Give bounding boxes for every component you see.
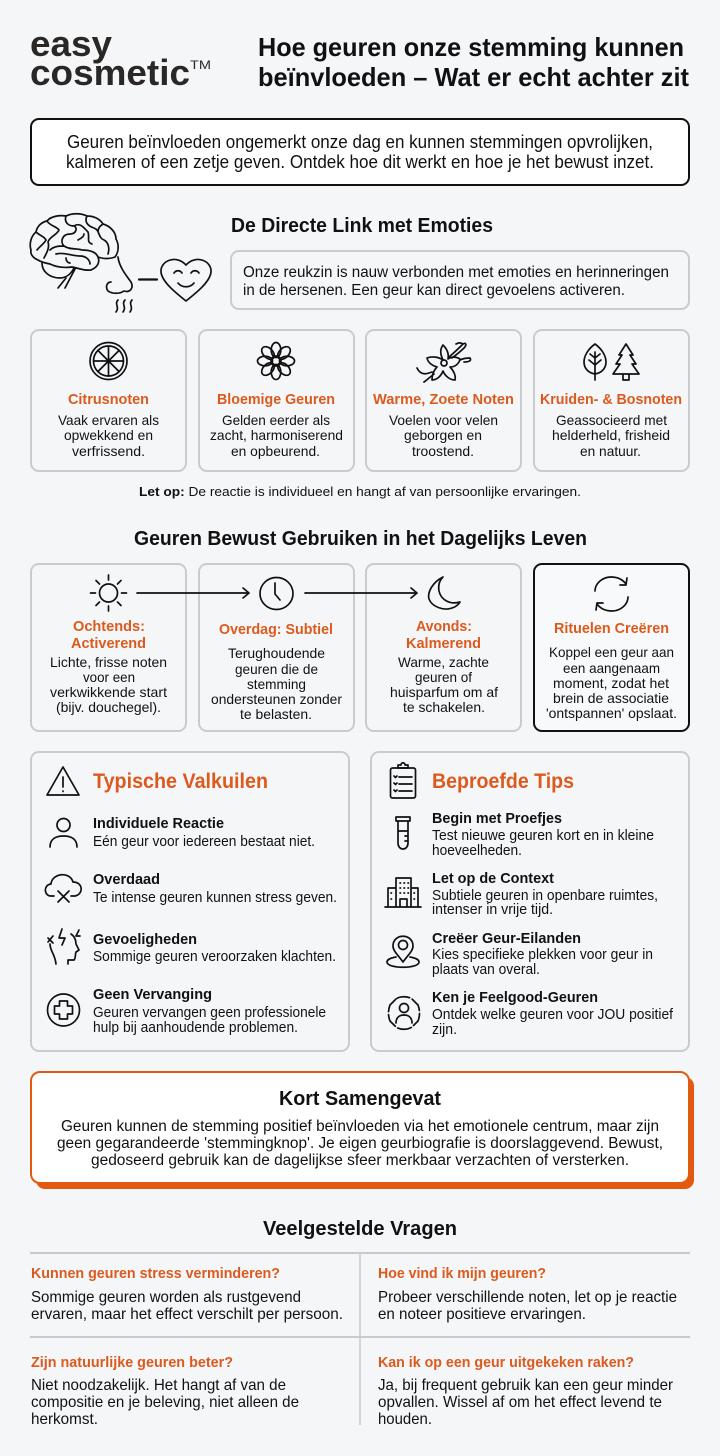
panel: Kruiden- & Bosnoten: Geassocieerd met bbox=[556, 412, 667, 428]
panel: Kort Samengevat: geen gegarandeerde 'stemmingknop'. Je eigen geurbiografie is doorslaggevend. Bewust, bbox=[57, 1135, 663, 1152]
icon: office buildings bbox=[385, 878, 421, 907]
panel: Beproefde Tips: plaats van overal. bbox=[432, 962, 540, 978]
panel: Avonds: geuren of bbox=[415, 669, 472, 685]
icon: test tube bbox=[396, 817, 410, 849]
panel: Ochtends: voor een bbox=[83, 669, 135, 685]
icon: head with lightning bbox=[48, 929, 80, 964]
icon: clock bbox=[260, 578, 293, 610]
panel: Overdag: geuren die de bbox=[235, 661, 318, 677]
panel: Citrusnoten: verfrissend. bbox=[72, 443, 145, 459]
panel: Ochtends: Ochtends: bbox=[73, 618, 145, 635]
icon: cloud with x bbox=[45, 875, 81, 902]
panel: Avonds bbox=[366, 564, 521, 731]
panel: Kort Samengevat: Kort Samengevat bbox=[279, 1088, 441, 1110]
panel: Typische Valkuilen: Geuren vervangen geen professionele bbox=[93, 1005, 326, 1021]
panel: Avonds: Warme, zachte bbox=[398, 654, 489, 670]
faq: natuurlijk: herkomst. bbox=[31, 1411, 98, 1428]
panel: Rituelen Creëren: brein de associatie bbox=[553, 690, 669, 706]
faq: mijn geuren: Probeer verschillende noten, let op je reactie bbox=[378, 1289, 677, 1306]
panel: Typische Valkuilen: hulp bij aanhoudende problemen. bbox=[93, 1020, 298, 1036]
faq: uitgekeken: Kan ik op een geur uitgekeken raken? bbox=[378, 1354, 634, 1371]
panel: Bloemige Geuren: Gelden eerder als bbox=[222, 412, 330, 428]
icon: flower bbox=[258, 342, 294, 380]
panel: Beproefde Tips bbox=[371, 752, 689, 1051]
panel: Citrusnoten: Citrusnoten bbox=[68, 391, 149, 408]
panel: Beproefde Tips: zijn. bbox=[432, 1022, 457, 1038]
icon: brain nose heart bbox=[30, 214, 211, 312]
panel: Rituelen Creëren: 'ontspannen' opslaat. bbox=[546, 705, 677, 721]
faq: stress: Kunnen geuren stress verminderen? bbox=[31, 1265, 280, 1282]
intro box bbox=[31, 119, 689, 185]
icon: clipboard bbox=[390, 763, 416, 798]
panel: Rituelen Creëren bbox=[534, 564, 689, 731]
panel: Ochtends: Activerend bbox=[71, 635, 146, 652]
faq: natuurlijk: Niet noodzakelijk. Het hangt af van de bbox=[31, 1377, 286, 1394]
panel: Typische Valkuilen: Gevoeligheden bbox=[93, 931, 197, 948]
panel: Kruiden- & Bosnoten bbox=[534, 330, 689, 471]
panel: Kort Samengevat: Geuren kunnen de stemming positief beïnvloeden via het emotionele centrum, maar zijn bbox=[61, 1118, 659, 1135]
panel: Overdag: te belasten. bbox=[240, 706, 312, 722]
note: Let op: Let op: De reactie is individueel en hangt af van persoonlijke ervaringen. bbox=[139, 484, 581, 499]
faq: uitgekeken bbox=[378, 1354, 674, 1428]
faq: uitgekeken: Ja, bij frequent gebruik kan een geur minder bbox=[378, 1377, 674, 1394]
panel: Citrusnoten: Vaak ervaren als bbox=[58, 412, 159, 428]
faq: stress: Sommige geuren worden als rustgevend bbox=[31, 1289, 301, 1306]
panel: Warme, Zoete Noten: Voelen voor velen bbox=[389, 412, 498, 428]
faq: mijn geuren bbox=[378, 1265, 677, 1323]
text box: reukzin bbox=[231, 251, 689, 309]
faq: natuurlijk bbox=[31, 1354, 299, 1428]
intro box: kalmeren of een zetje geven. Ontdek hoe dit werkt en hoe je het bewust inzet. bbox=[66, 152, 654, 172]
panel: Citrusnoten: opwekkend en bbox=[64, 427, 153, 443]
panel: Kort Samengevat: gedoseerd gebruik kan de dagelijkse sfeer merkbaar verzachten of versterken. bbox=[91, 1152, 629, 1169]
panel: Bloemige Geuren bbox=[199, 330, 354, 471]
panel: Typische Valkuilen: Overdaad bbox=[93, 871, 160, 888]
panel: Warme, Zoete Noten: troostend. bbox=[412, 443, 474, 459]
panel: Typische Valkuilen: Individuele Reactie bbox=[93, 815, 224, 832]
panel: Bloemige Geuren: en opbeurend. bbox=[231, 443, 320, 459]
panel: Kruiden- & Bosnoten: helderheld, frisheid bbox=[552, 427, 670, 443]
panel: Kruiden- & Bosnoten: Kruiden- & Bosnoten bbox=[540, 391, 682, 408]
arrow: overdag to avond bbox=[305, 588, 417, 598]
panel: Rituelen Creëren: Koppel een geur aan bbox=[549, 644, 674, 660]
panel: Typische Valkuilen: Sommige geuren veroorzaken klachten. bbox=[93, 949, 336, 965]
panel: Ochtends: (bijv. douchegel). bbox=[56, 699, 161, 715]
faq: stress bbox=[31, 1265, 343, 1323]
faq: mijn geuren: en noteer positieve ervaringen. bbox=[378, 1306, 586, 1323]
faq: stress: ervaren, maar het effect verschilt per persoon. bbox=[31, 1306, 343, 1323]
icon: person bbox=[50, 818, 77, 847]
icon: vanilla flower bbox=[417, 343, 471, 382]
panel: Avonds: te schakelen. bbox=[403, 699, 485, 715]
panel: Typische Valkuilen: Geen Vervanging bbox=[93, 986, 212, 1003]
panel: Overdag bbox=[199, 564, 354, 731]
title: Hoe geuren onze stemming kunnen bbox=[258, 32, 684, 62]
panel: Avonds: huisparfum om af bbox=[390, 684, 498, 700]
logo: cosmetic bbox=[30, 52, 190, 93]
panel: Bloemige Geuren: Bloemige Geuren bbox=[217, 391, 335, 408]
icon: citrus slice bbox=[90, 342, 127, 380]
icon: person in scent cloud bbox=[388, 997, 420, 1029]
panel: Warme, Zoete Noten: geborgen en bbox=[404, 427, 482, 443]
panel: Overdag: Terughoudende bbox=[228, 645, 325, 661]
icon: medical cross bbox=[48, 994, 80, 1026]
panel: Beproefde Tips: Creëer Geur-Eilanden bbox=[432, 930, 581, 947]
panel: Warme, Zoete Noten bbox=[366, 330, 521, 471]
panel: Ochtends: verkwikkende start bbox=[50, 684, 167, 700]
icon: warning triangle bbox=[47, 767, 79, 795]
panel: Beproefde Tips: intenser in vrije tijd. bbox=[432, 902, 553, 918]
panel: Typische Valkuilen: Eén geur voor iedereen bestaat niet. bbox=[93, 834, 315, 850]
panel: Typische Valkuilen: Te intense geuren kunnen stress geven. bbox=[93, 890, 337, 906]
heading: Veelgestelde Vragen: Veelgestelde Vragen bbox=[263, 1218, 457, 1240]
icon: leaf and tree bbox=[584, 344, 639, 380]
panel: Rituelen Creëren: moment, zodat het bbox=[553, 675, 669, 691]
faq: mijn geuren: Hoe vind ik mijn geuren? bbox=[378, 1265, 546, 1282]
logo bbox=[30, 23, 211, 93]
panel: Overdag: stemming bbox=[247, 676, 306, 692]
title: beïnvloeden – Wat er echt achter zit bbox=[258, 62, 689, 92]
intro box: Geuren beïnvloeden ongemerkt onze dag en kunnen stemmingen opvrolijken, bbox=[67, 132, 653, 152]
panel: Citrusnoten bbox=[31, 330, 186, 471]
faq: natuurlijk: compositie en je beleving, niet alleen de bbox=[31, 1394, 299, 1411]
panel: Beproefde Tips: Ontdek welke geuren voor JOU positief bbox=[432, 1007, 674, 1023]
panel: Beproefde Tips: Let op de Context bbox=[432, 870, 554, 887]
heading: Geuren Bewust Gebruiken: Geuren Bewust Gebruiken in het Dagelijks Leven bbox=[134, 528, 587, 550]
panel: Kort Samengevat bbox=[31, 1072, 694, 1189]
panel: Beproefde Tips: Begin met Proefjes bbox=[432, 810, 562, 827]
panel: Beproefde Tips: Ken je Feelgood-Geuren bbox=[432, 989, 598, 1006]
panel: Warme, Zoete Noten: Warme, Zoete Noten bbox=[373, 391, 514, 408]
text box: reukzin: Onze reukzin is nauw verbonden met emoties en herinneringen bbox=[243, 264, 669, 281]
text box: reukzin: in de hersenen. Een geur kan direct gevoelens activeren. bbox=[243, 282, 625, 299]
faq: natuurlijk: Zijn natuurlijke geuren beter? bbox=[31, 1354, 233, 1371]
logo: easy bbox=[30, 23, 112, 64]
panel: Overdag: Overdag: Subtiel bbox=[219, 621, 333, 638]
arrow: ochtend to overdag bbox=[137, 588, 249, 598]
faq: uitgekeken: opvallen. Wissel af om het effect levend te bbox=[378, 1394, 662, 1411]
panel: Beproefde Tips: Subtiele geuren in openbare ruimtes, bbox=[432, 888, 658, 904]
panel: Kruiden- & Bosnoten: en natuur. bbox=[580, 443, 641, 459]
title bbox=[258, 32, 689, 92]
panel: Rituelen Creëren: een aangenaam bbox=[563, 660, 660, 676]
heading: De Directe Link met Emoties: De Directe Link met Emoties bbox=[231, 215, 493, 237]
panel: Typische Valkuilen bbox=[31, 752, 349, 1051]
panel: Ochtends: Lichte, frisse noten bbox=[50, 654, 167, 670]
faq: uitgekeken: houden. bbox=[378, 1411, 432, 1428]
icon: moon bbox=[429, 577, 460, 609]
panel: Typische Valkuilen: Typische Valkuilen bbox=[93, 770, 268, 793]
panel: Beproefde Tips: Kies specifieke plekken voor geur in bbox=[432, 947, 653, 963]
icon: refresh cycle bbox=[595, 577, 628, 611]
panel: Overdag: ondersteunen zonder bbox=[211, 691, 342, 707]
panel: Avonds: Avonds: bbox=[416, 618, 472, 635]
panel: Rituelen Creëren: Rituelen Creëren bbox=[554, 620, 669, 637]
panel: Beproefde Tips: Beproefde Tips bbox=[432, 770, 574, 793]
panel: Bloemige Geuren: zacht, harmoniserend bbox=[210, 427, 343, 443]
panel: Beproefde Tips: Test nieuwe geuren kort en in kleine bbox=[432, 828, 654, 844]
logo: TM bbox=[190, 58, 211, 72]
icon: map pin bbox=[387, 936, 419, 967]
panel: Ochtends bbox=[31, 564, 186, 731]
panel: Avonds: Kalmerend bbox=[406, 635, 481, 652]
panel: Beproefde Tips: hoeveelheden. bbox=[432, 843, 522, 859]
icon: sun bbox=[90, 575, 126, 611]
